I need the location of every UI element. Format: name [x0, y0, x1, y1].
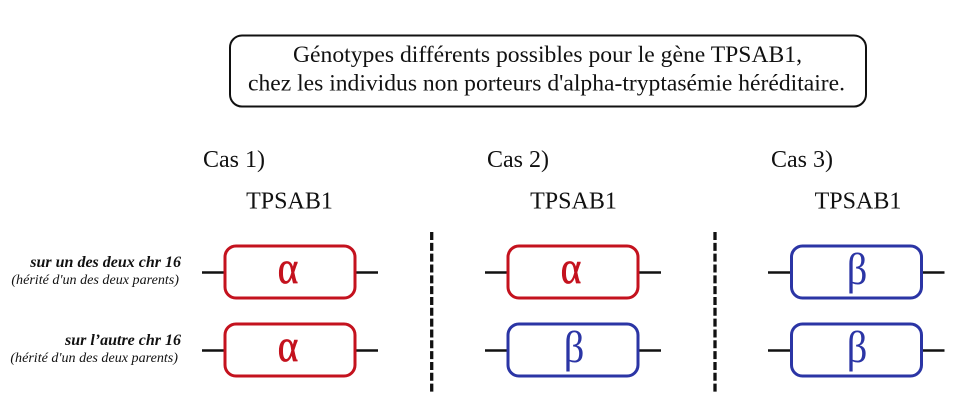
row label: first chromosome: sur un des deux chr 16 — [29, 254, 181, 271]
cas 3 beta gene bottom — [768, 323, 944, 376]
row label: first chromosome — [11, 254, 181, 288]
cas 1 gene name: TPSAB1 — [246, 188, 333, 214]
cas 2 beta gene: β — [564, 323, 584, 372]
cas 2 alpha gene: α — [561, 243, 581, 294]
cas 1 alpha gene bottom — [202, 321, 378, 376]
cas 3 beta gene top: β — [847, 245, 867, 294]
cas 2 alpha gene — [485, 243, 661, 298]
cas 3 beta gene bottom: β — [847, 323, 867, 372]
title box — [230, 36, 866, 106]
cas 2 beta gene — [485, 323, 661, 376]
cas 2 gene name: TPSAB1 — [530, 188, 617, 214]
cas 1 heading: Cas 1) — [203, 147, 265, 173]
panel: cas 3 — [768, 147, 944, 376]
panel: cas 1 — [202, 147, 378, 376]
cas 3 heading: Cas 3) — [771, 147, 833, 173]
divider 1 — [430, 232, 433, 392]
divider 2 — [713, 232, 717, 392]
row label: second chromosome: sur l’autre chr 16 — [64, 332, 181, 349]
cas 1 alpha gene top: α — [278, 243, 298, 294]
row label: first chromosome: (hérité d'un des deux parents) — [11, 272, 179, 288]
row label: second chromosome — [10, 332, 181, 366]
cas 2 heading: Cas 2) — [487, 147, 549, 173]
cas 3 gene name: TPSAB1 — [815, 188, 901, 214]
row label: second chromosome: (hérité d'un des deux parents) — [10, 350, 178, 366]
cas 1 alpha gene top — [202, 243, 378, 298]
title box: chez les individus non porteurs d'alpha-tryptasémie héréditaire. — [248, 70, 845, 96]
cas 1 alpha gene bottom: α — [278, 321, 298, 372]
panel: cas 2 — [485, 147, 661, 376]
title box: Génotypes différents possibles pour le gène TPSAB1, — [293, 42, 802, 68]
cas 3 beta gene top — [768, 245, 944, 298]
